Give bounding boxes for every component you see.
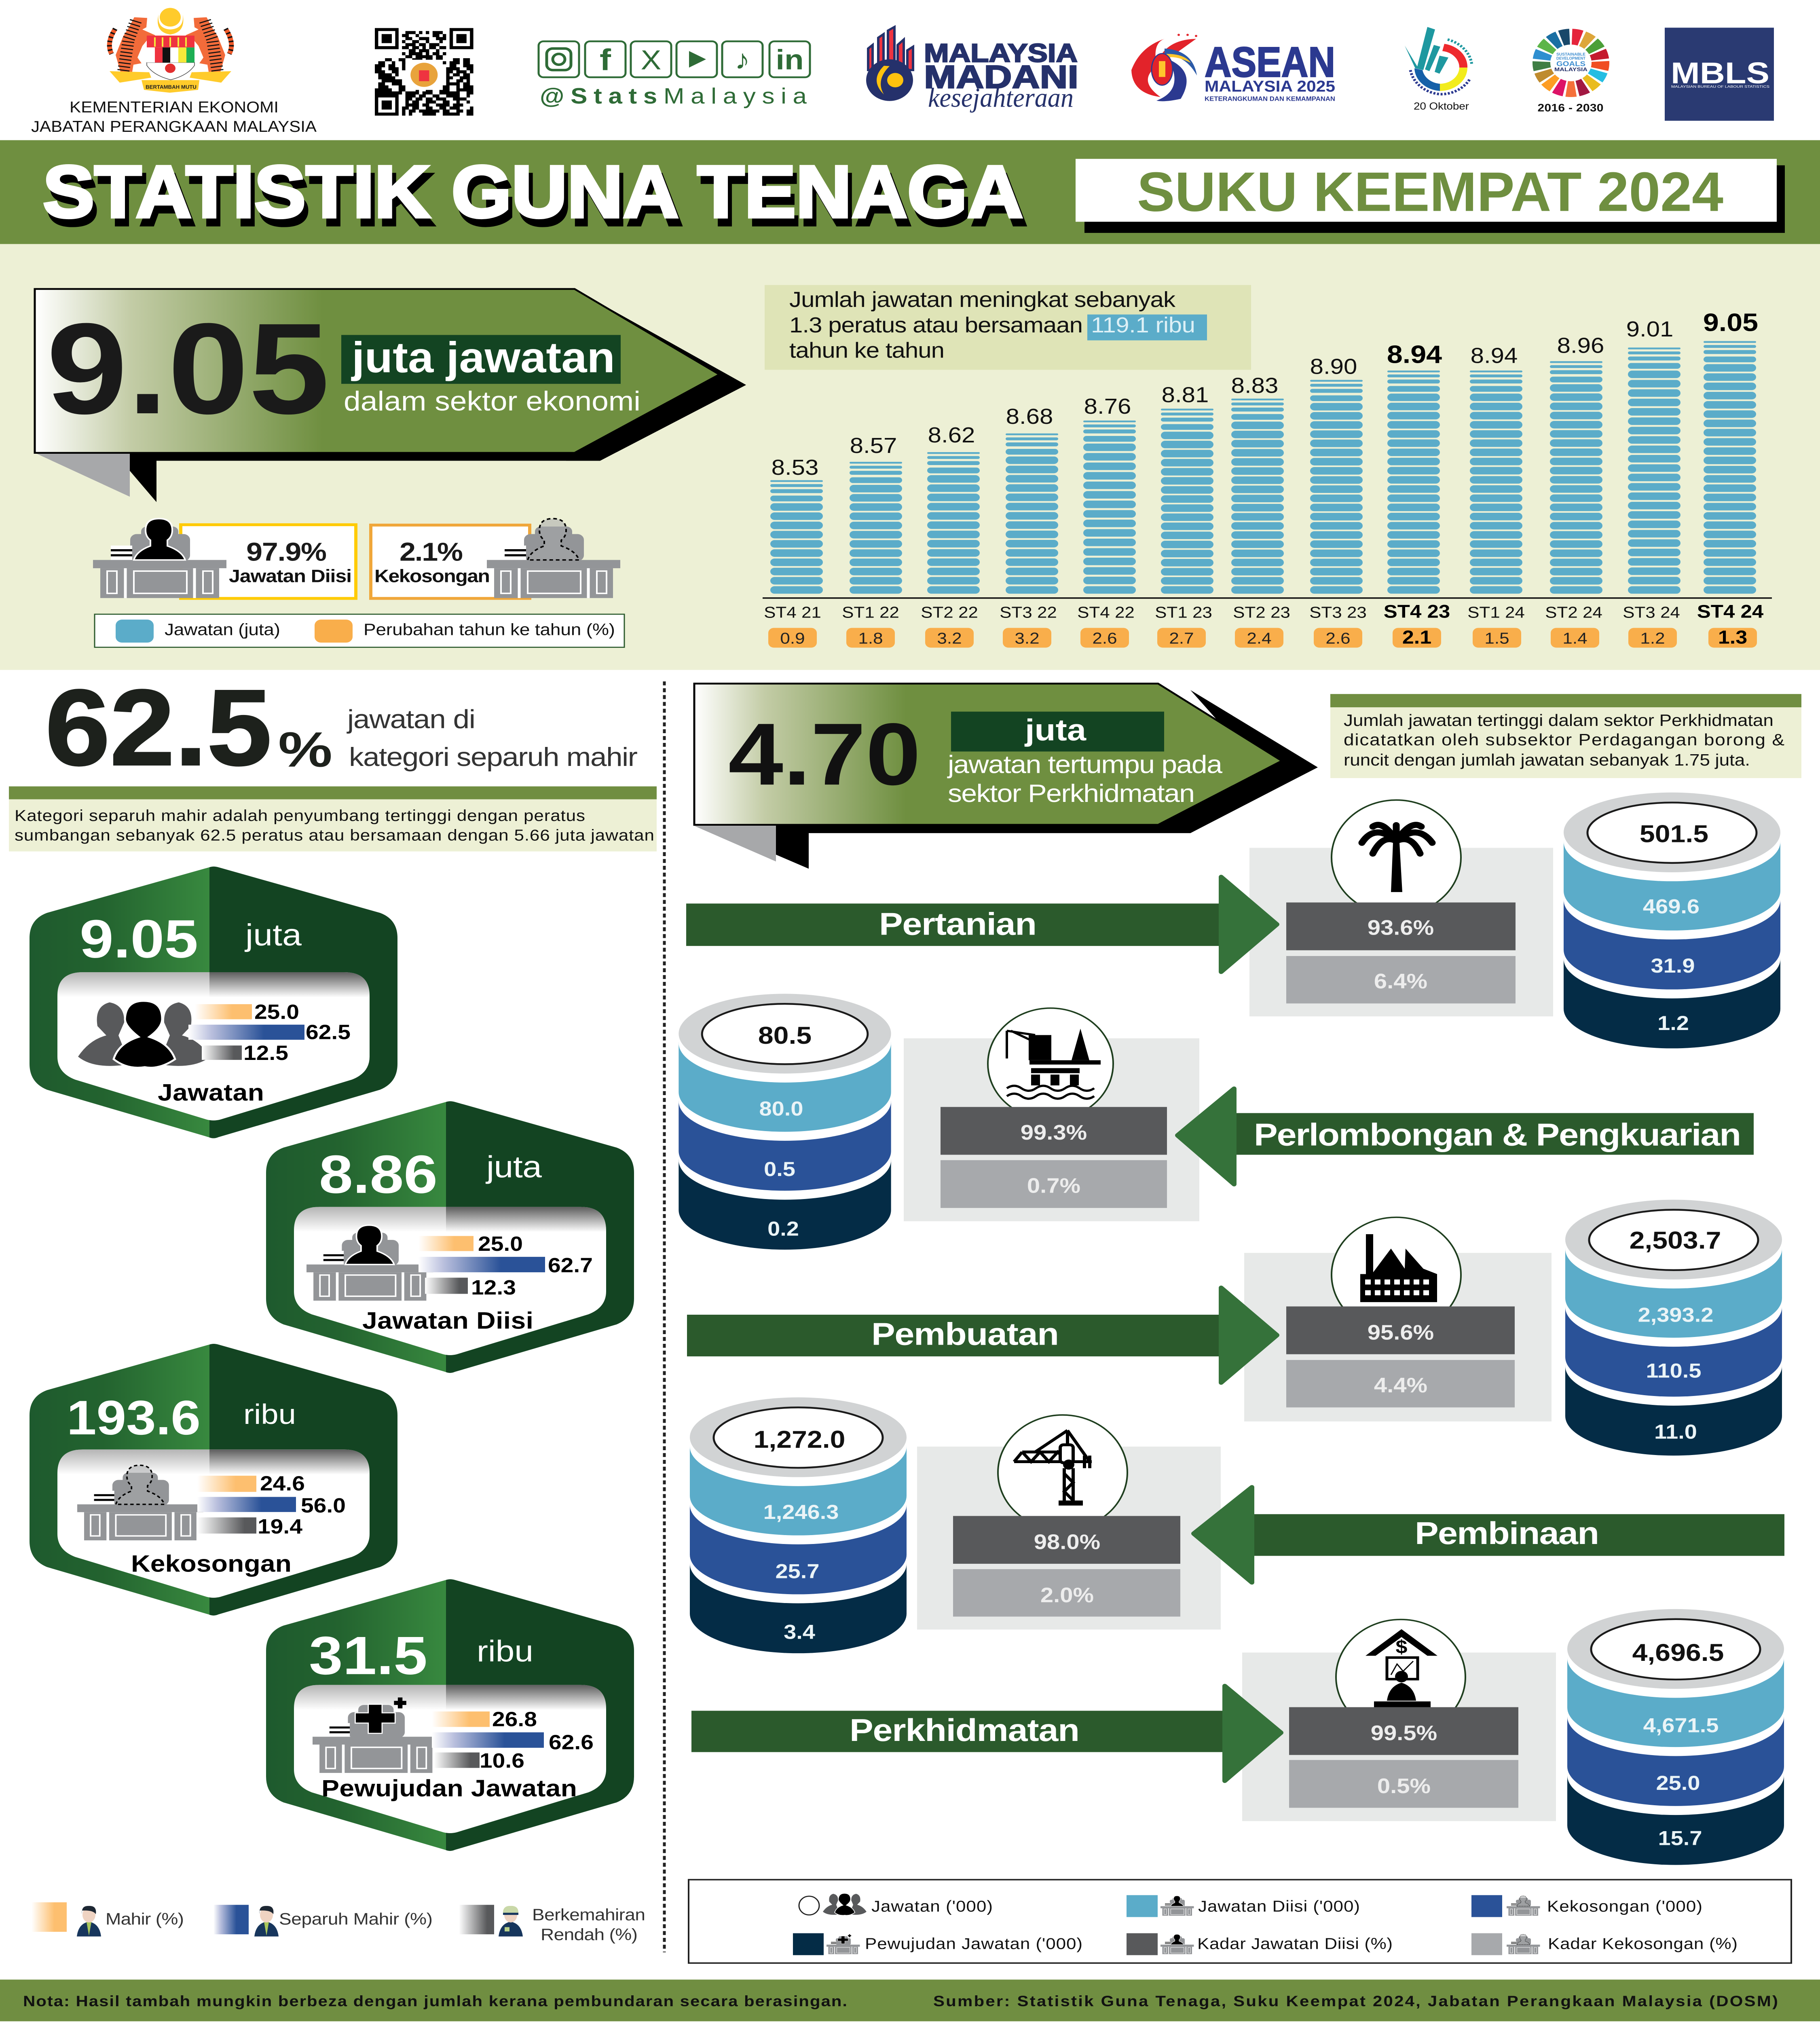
filled jobs stat: Jawatan Diisi <box>229 566 352 586</box>
arrow banner: 4.70 juta: sektor Perkhidmatan <box>948 779 1195 808</box>
callout: year on year increase: 119.1 ribu <box>1091 313 1195 337</box>
panel: Pewujudan Jawatan 31.5 ribu: Pewujudan Jawatan <box>321 1775 577 1802</box>
quarter labels: ST1 24 <box>1467 603 1525 621</box>
icon: tower crane <box>1014 1430 1092 1506</box>
year on year change pills: 1.5 <box>1484 629 1509 647</box>
social media icons: ♪ <box>735 45 750 75</box>
cylinder: 0.5 <box>764 1158 795 1180</box>
bar chart: jobs by quarter <box>763 309 1772 648</box>
arrow banner: 9.05 juta jawatan: 9.05 <box>47 297 330 441</box>
sector banner <box>687 1288 1277 1383</box>
rate panel <box>917 1415 1221 1630</box>
bars <box>770 341 1756 594</box>
filled jobs stat: 97.9% <box>246 537 327 567</box>
legend: sector keys <box>689 1880 1791 1963</box>
callout: services sector note: runcit dengan jumlah jawatan sebanyak 1.75 juta. <box>1344 751 1750 769</box>
cylinder: 3.4 <box>784 1621 815 1643</box>
sector banner <box>686 877 1277 972</box>
sector banner <box>691 1686 1281 1781</box>
icon: house and monitor: $ <box>1396 1637 1407 1657</box>
panel: Kekosongan 193.6 ribu: ribu <box>243 1398 296 1430</box>
year on year change pills: 2.6 <box>1325 629 1351 647</box>
arrow banner: 4.70 juta: jawatan tertumpu pada <box>947 751 1222 779</box>
cylinder <box>1567 1609 1784 1865</box>
icon: job creation desk <box>313 1697 439 1773</box>
icon: oil rig <box>1007 1029 1101 1099</box>
skill bars: 24.6 <box>260 1472 305 1495</box>
panel: Jawatan Diisi 8.86 juta: juta <box>486 1150 542 1184</box>
cylinder: 80.0 <box>759 1098 803 1120</box>
quarter labels: ST3 23 <box>1309 603 1367 621</box>
quarter labels: ST3 24 <box>1623 603 1680 621</box>
year on year change pills: 2.6 <box>1092 629 1117 647</box>
sector banner: Pembinaan <box>1415 1516 1599 1551</box>
arrow banner: 9.05 juta jawatan <box>35 289 746 502</box>
rate panel: 4.4% <box>1374 1373 1427 1397</box>
logo: ASEAN Malaysia 2025 <box>1131 34 1335 102</box>
callout: semi-skilled note <box>9 787 657 851</box>
cylinder: 1.2 <box>1657 1012 1689 1034</box>
skill bars <box>197 1472 346 1538</box>
legend: sector keys: Kadar Jawatan Diisi (%) <box>1197 1935 1393 1952</box>
sector banner: Perkhidmatan <box>850 1713 1080 1748</box>
logo: Malaysia Madani: kesejahteraan <box>928 82 1074 113</box>
quarter labels: ST2 22 <box>921 603 978 621</box>
cylinder: 469.6 <box>1643 895 1700 918</box>
social media icons: f <box>600 43 611 76</box>
rate panel: 0.7% <box>1027 1174 1080 1197</box>
logo: MBLS: MBLS <box>1671 56 1769 90</box>
cylinder: 25.7 <box>776 1560 819 1583</box>
title: STATISTIK GUNA TENAGA <box>43 150 1023 233</box>
rate panel: 0.5% <box>1377 1774 1431 1798</box>
rate panel <box>1244 1217 1552 1421</box>
legend: sector keys: Kekosongan ('000) <box>1547 1897 1702 1915</box>
arrow banner: 4.70 juta <box>694 683 1318 869</box>
skill bars: 26.8 <box>492 1708 537 1731</box>
heading: 62.5% semi-skilled: jawatan di <box>347 704 476 734</box>
cylinder <box>1564 793 1780 1048</box>
icon: house and monitor <box>1366 1629 1437 1707</box>
social media icons: X <box>641 45 661 76</box>
skill bars: 56.0 <box>301 1494 346 1517</box>
bar values: 8.53 <box>772 456 818 480</box>
skill bars: 62.5 <box>306 1021 351 1044</box>
heading: 62.5% semi-skilled <box>45 668 638 788</box>
filled jobs stat <box>93 518 356 599</box>
rate panel: 98.0% <box>1034 1530 1100 1554</box>
panel: Jawatan 9.05 juta: 9.05 <box>80 909 198 969</box>
sector: Pertanian <box>686 793 1780 1048</box>
callout: year on year increase: 1.3 peratus atau bersamaan <box>789 313 1083 337</box>
cylinder: 31.9 <box>1651 955 1695 977</box>
cylinder: 15.7 <box>1658 1827 1702 1850</box>
icon: people <box>78 1001 210 1068</box>
skill bars: 12.3 <box>471 1276 516 1299</box>
sector: Perkhidmatan <box>691 1609 1784 1865</box>
arrow banner: 4.70 juta: juta <box>1024 713 1087 747</box>
callout: services sector note: dicatatkan oleh subsektor Perdagangan borong & <box>1344 731 1784 749</box>
panel: Jawatan Diisi 8.86 juta <box>266 1101 634 1373</box>
logo: MBLS <box>1665 27 1774 121</box>
quarter labels: ST4 23 <box>1384 601 1450 622</box>
skill bars: 19.4 <box>258 1515 302 1538</box>
social handle: @Stats Malaysia <box>540 84 807 108</box>
cylinder: 1,246.3 <box>763 1501 839 1523</box>
logo: Sustainable Development Goals wheel: GOALS <box>1556 60 1585 68</box>
quarter labels: ST4 22 <box>1077 603 1135 621</box>
quarter labels: ST1 23 <box>1155 603 1212 621</box>
title: STATISTIK GUNA TENAGA <box>47 159 1027 241</box>
sector banner: Perlombongan & Pengkuarian <box>1254 1117 1741 1152</box>
cylinder <box>690 1397 907 1653</box>
sector: Pembuatan <box>687 1200 1782 1455</box>
ministry name: JABATAN PERANGKAAN MALAYSIA <box>31 117 317 135</box>
rate panel: 6.4% <box>1374 969 1427 993</box>
panel: Pewujudan Jawatan 31.5 ribu: ribu <box>477 1634 533 1668</box>
quarter labels: ST2 24 <box>1545 603 1602 621</box>
skill bars: 62.7 <box>548 1254 593 1277</box>
legend: skill levels: Rendah (%) <box>541 1926 638 1944</box>
cylinder: 11.0 <box>1654 1421 1697 1443</box>
logo: Sustainable Development Goals wheel: 2016 - 2030 <box>1537 102 1604 114</box>
bar values: 8.94 <box>1387 341 1442 369</box>
cylinder: 25.0 <box>1656 1772 1700 1794</box>
arrow banner: 9.05 juta jawatan: juta jawatan <box>351 334 615 382</box>
bar values <box>772 309 1758 480</box>
bar values: 8.96 <box>1557 334 1604 358</box>
QR code <box>375 28 473 116</box>
logo: Sustainable Development Goals wheel: MALAYSIA <box>1554 67 1587 73</box>
icon: vacant desk <box>77 1465 203 1540</box>
callout: services sector note: Jumlah jawatan tertinggi dalam sektor Perkhidmatan <box>1344 712 1773 730</box>
rate panel: 2.0% <box>1040 1583 1094 1607</box>
rate panel <box>1242 1620 1556 1821</box>
logo: Jata Negara crest <box>110 8 231 93</box>
rate panel: 99.3% <box>1021 1121 1087 1144</box>
skill bars <box>419 1233 593 1299</box>
vacancies stat: Kekosongan <box>374 566 490 586</box>
logo: Jata Negara crest: BERTAMBAH MUTU <box>146 84 197 90</box>
quarter labels: ST2 23 <box>1233 603 1290 621</box>
logo: MyStats Day <box>1405 27 1472 112</box>
sector banner <box>1194 1487 1784 1582</box>
cylinder: 2,503.7 <box>1630 1227 1721 1254</box>
year on year change pills: 3.2 <box>937 629 962 647</box>
logo: ASEAN Malaysia 2025: ASEAN <box>1205 38 1335 86</box>
year on year change pills: 2.4 <box>1247 629 1272 647</box>
logo: ASEAN Malaysia 2025: MALAYSIA 2025 <box>1205 77 1335 95</box>
chart legend: Perubahan tahun ke tahun (%) <box>364 621 615 639</box>
year on year change pills: 3.2 <box>1015 629 1040 647</box>
panel: Pewujudan Jawatan 31.5 ribu <box>266 1579 634 1851</box>
vacancies stat <box>371 518 620 599</box>
callout: year on year increase: Jumlah jawatan meningkat sebanyak <box>789 288 1176 312</box>
panel: Pewujudan Jawatan 31.5 ribu: 31.5 <box>309 1626 427 1686</box>
cylinder <box>679 994 891 1250</box>
logo: Sustainable Development Goals wheel: DEVELOPMENT <box>1556 57 1586 61</box>
logo: Sustainable Development Goals wheel <box>1537 37 1604 114</box>
quarter labels: ST3 22 <box>1000 603 1057 621</box>
chart legend <box>95 614 624 647</box>
footer: Sumber: Statistik Guna Tenaga, Suku Keempat 2024, Jabatan Perangkaan Malaysia (DOSM) <box>933 1993 1778 2009</box>
panel: total jobs summary <box>0 244 1820 670</box>
bar values: 8.76 <box>1084 395 1131 419</box>
year on year change pills: 1.8 <box>858 629 883 647</box>
rate panel: 99.5% <box>1371 1721 1437 1745</box>
bar values: 9.01 <box>1626 317 1673 341</box>
logo: Sustainable Development Goals wheel: SUSTAINABLE <box>1556 53 1585 57</box>
quarter labels: ST4 24 <box>1697 601 1763 622</box>
panel: Jawatan 9.05 juta: juta <box>245 918 302 952</box>
title band <box>0 140 1820 244</box>
bar values: 8.68 <box>1006 405 1053 429</box>
legend: skill levels: Mahir (%) <box>106 1910 184 1929</box>
callout: year on year increase <box>765 285 1251 370</box>
legend: skill levels <box>32 1902 645 1944</box>
divider <box>663 681 666 1952</box>
cylinder: 501.5 <box>1640 820 1708 847</box>
bar values: 8.94 <box>1471 344 1518 368</box>
bar values: 8.81 <box>1162 383 1209 407</box>
callout: year on year increase: tahun ke tahun <box>789 338 945 363</box>
skill bars <box>188 1000 351 1064</box>
panel: Jawatan 9.05 juta: Jawatan <box>158 1079 264 1106</box>
icon: palm <box>1362 825 1432 892</box>
panel: Jawatan Diisi 8.86 juta: Jawatan Diisi <box>362 1307 533 1334</box>
logo: ASEAN Malaysia 2025: KETERANGKUMAN DAN KEMAMPANAN <box>1205 95 1335 102</box>
panel: Jawatan Diisi 8.86 juta: 8.86 <box>319 1144 438 1205</box>
sector banner: Pembuatan <box>871 1316 1059 1352</box>
arrow banner: 4.70 juta: 4.70 <box>728 705 921 804</box>
callout: semi-skilled note: Kategori separuh mahir adalah penyumbang tertinggi dengan peratus <box>15 806 585 824</box>
heading: 62.5% semi-skilled: kategori separuh mahir <box>349 742 638 772</box>
panel: Jawatan 9.05 juta <box>30 867 397 1138</box>
legend: sector keys: Jawatan ('000) <box>871 1897 993 1915</box>
logo: MBLS: MALAYSIAN BUREAU OF LABOUR STATISTICS <box>1671 85 1769 89</box>
legend: sector keys: Pewujudan Jawatan ('000) <box>865 1935 1082 1952</box>
skill bars: 10.6 <box>480 1749 524 1772</box>
subtitle box: SUKU KEEMPAT 2024 <box>1137 161 1723 223</box>
icon: filled desk <box>307 1225 433 1301</box>
logo: Malaysia Madani <box>866 27 1078 113</box>
skill bars: 25.0 <box>478 1233 523 1255</box>
sector: Pembinaan <box>690 1397 1784 1653</box>
social media icons <box>539 41 810 77</box>
year on year change pills: 1.2 <box>1640 629 1665 647</box>
sector: Perlombongan & Pengkuarian <box>679 994 1754 1250</box>
year on year change pills: 2.1 <box>1402 627 1431 648</box>
vacancies stat: 2.1% <box>400 537 463 567</box>
callout: semi-skilled note: sumbangan sebanyak 62.5 peratus atau bersamaan dengan 5.66 juta jawatan <box>15 826 654 844</box>
quarter labels: ST1 22 <box>842 603 899 621</box>
skill bars: 62.6 <box>549 1731 594 1754</box>
panel: Kekosongan 193.6 ribu: Kekosongan <box>131 1550 292 1577</box>
year on year change pills: 0.9 <box>780 629 805 647</box>
logo: Malaysia Madani: MADANI <box>924 59 1078 95</box>
logo: Malaysia Madani: MALAYSIA <box>924 39 1078 68</box>
ministry name <box>31 98 317 135</box>
quarter labels <box>764 601 1763 622</box>
bar values: 8.62 <box>928 423 975 447</box>
footer <box>0 1980 1820 2021</box>
bar values: 9.05 <box>1703 309 1758 337</box>
panel: Kekosongan 193.6 ribu <box>30 1344 397 1616</box>
skill bars: 25.0 <box>254 1000 299 1024</box>
rate panel <box>1249 800 1553 1016</box>
quarter labels: ST4 21 <box>764 603 821 621</box>
cylinder: 80.5 <box>758 1022 812 1049</box>
social media icons: in <box>776 44 804 76</box>
cylinder: 4,696.5 <box>1632 1639 1724 1666</box>
rate panel: 93.6% <box>1368 916 1434 939</box>
ministry name: KEMENTERIAN EKONOMI <box>70 98 279 116</box>
year on year change pills: 1.4 <box>1562 629 1587 647</box>
sector banner: Pertanian <box>879 906 1037 941</box>
heading: 62.5% semi-skilled: % <box>278 722 332 777</box>
legend: skill levels: Berkemahiran <box>532 1906 645 1924</box>
cylinder <box>1565 1200 1782 1455</box>
legend: skill levels: Separuh Mahir (%) <box>279 1910 433 1929</box>
year on year change pills: 1.3 <box>1718 627 1747 648</box>
year on year change pills: 2.7 <box>1169 629 1194 647</box>
bar values: 8.83 <box>1231 374 1278 398</box>
sector banner <box>1177 1089 1754 1184</box>
icon: factory <box>1360 1234 1437 1302</box>
rate panel <box>904 1008 1199 1221</box>
callout: services sector note <box>1330 694 1801 778</box>
bar values: 8.57 <box>850 434 897 458</box>
cylinder: 110.5 <box>1646 1360 1702 1382</box>
year on year change pills <box>768 627 1757 648</box>
cylinder: 0.2 <box>767 1218 799 1240</box>
skill bars: 12.5 <box>243 1042 288 1064</box>
legend: sector keys: Kadar Kekosongan (%) <box>1548 1935 1738 1952</box>
footer: Nota: Hasil tambah mungkin berbeza dengan jumlah kerana pembundaran secara berasingan. <box>23 1993 847 2009</box>
bar values: 8.90 <box>1310 355 1357 379</box>
legend: sector keys: Jawatan Diisi ('000) <box>1198 1897 1360 1915</box>
heading: 62.5% semi-skilled: 62.5 <box>45 668 272 788</box>
rate panel: 95.6% <box>1368 1320 1434 1344</box>
panel: Kekosongan 193.6 ribu: 193.6 <box>67 1391 201 1445</box>
cylinder: 2,393.2 <box>1638 1304 1713 1326</box>
cylinder: 1,272.0 <box>754 1426 845 1453</box>
arrow banner: 9.05 juta jawatan: dalam sektor ekonomi <box>344 386 640 417</box>
cylinder: 4,671.5 <box>1643 1715 1719 1737</box>
skill bars <box>432 1708 594 1772</box>
logo: MyStats Day: 20 Oktober <box>1414 101 1469 112</box>
chart legend: Jawatan (juta) <box>165 621 280 639</box>
